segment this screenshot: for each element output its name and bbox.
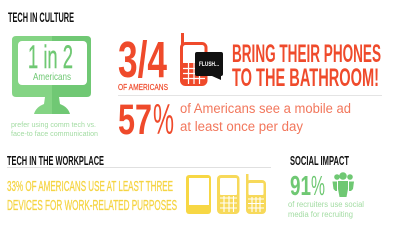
- icon: three yellow devices: [186, 174, 266, 214]
- text: recruiters: media for recruiting: [288, 210, 353, 219]
- stat: 57%: %: [153, 96, 174, 144]
- antenna phone: [246, 174, 266, 214]
- heading: tech in the workplace: TECH IN THE WORKPLACE: [7, 153, 104, 168]
- heading: social impact: SOCIAL IMPACT: [290, 153, 349, 168]
- icon: people group: [332, 172, 354, 197]
- stat: 3/4 of Americans: OF AMERICANS: [118, 83, 168, 92]
- icon: red phone with flush bubble: [181, 33, 223, 84]
- stat: 91%: 91: [290, 170, 311, 201]
- icon: monitor with 1 in 2 Americans: [12, 36, 91, 114]
- headline: bring their phones: [232, 40, 381, 92]
- smartphone: [186, 175, 211, 214]
- text: 33% of Americans: 33% OF AMERICANS USE AT LEAST THREE: [7, 178, 173, 195]
- icon: monitor with 1 in 2 Americans: 1 in 2: [28, 39, 73, 75]
- speech bubble: FLUSH...: [199, 62, 219, 68]
- text: prefer using comm tech: prefer using comm tech vs.: [11, 120, 96, 129]
- text: mobile ad: of Americans see a mobile ad: [180, 101, 351, 116]
- icon: monitor with 1 in 2 Americans: Americans: [33, 71, 71, 83]
- text: mobile ad: at least once per day: [180, 119, 303, 134]
- text: prefer using comm tech: face-to face communication: [11, 129, 98, 138]
- keypad phone: [217, 175, 240, 214]
- text: recruiters: of recruiters use social: [288, 200, 364, 209]
- text: recruiters: [288, 200, 364, 219]
- stat: 57%: 57: [118, 96, 152, 144]
- text: 33% of Americans: DEVICES FOR WORK-RELATED PURPOSES: [7, 197, 177, 214]
- text: 33% of Americans: [7, 178, 177, 214]
- stat: 3/4 of Americans: [118, 31, 168, 92]
- stat: 3/4 of Americans: 3/4: [118, 31, 167, 88]
- heading: tech in culture: TECH IN CULTURE: [8, 10, 74, 25]
- text: mobile ad: [180, 101, 351, 134]
- stat: 91%: %: [311, 170, 325, 201]
- text: prefer using comm tech: [11, 120, 98, 138]
